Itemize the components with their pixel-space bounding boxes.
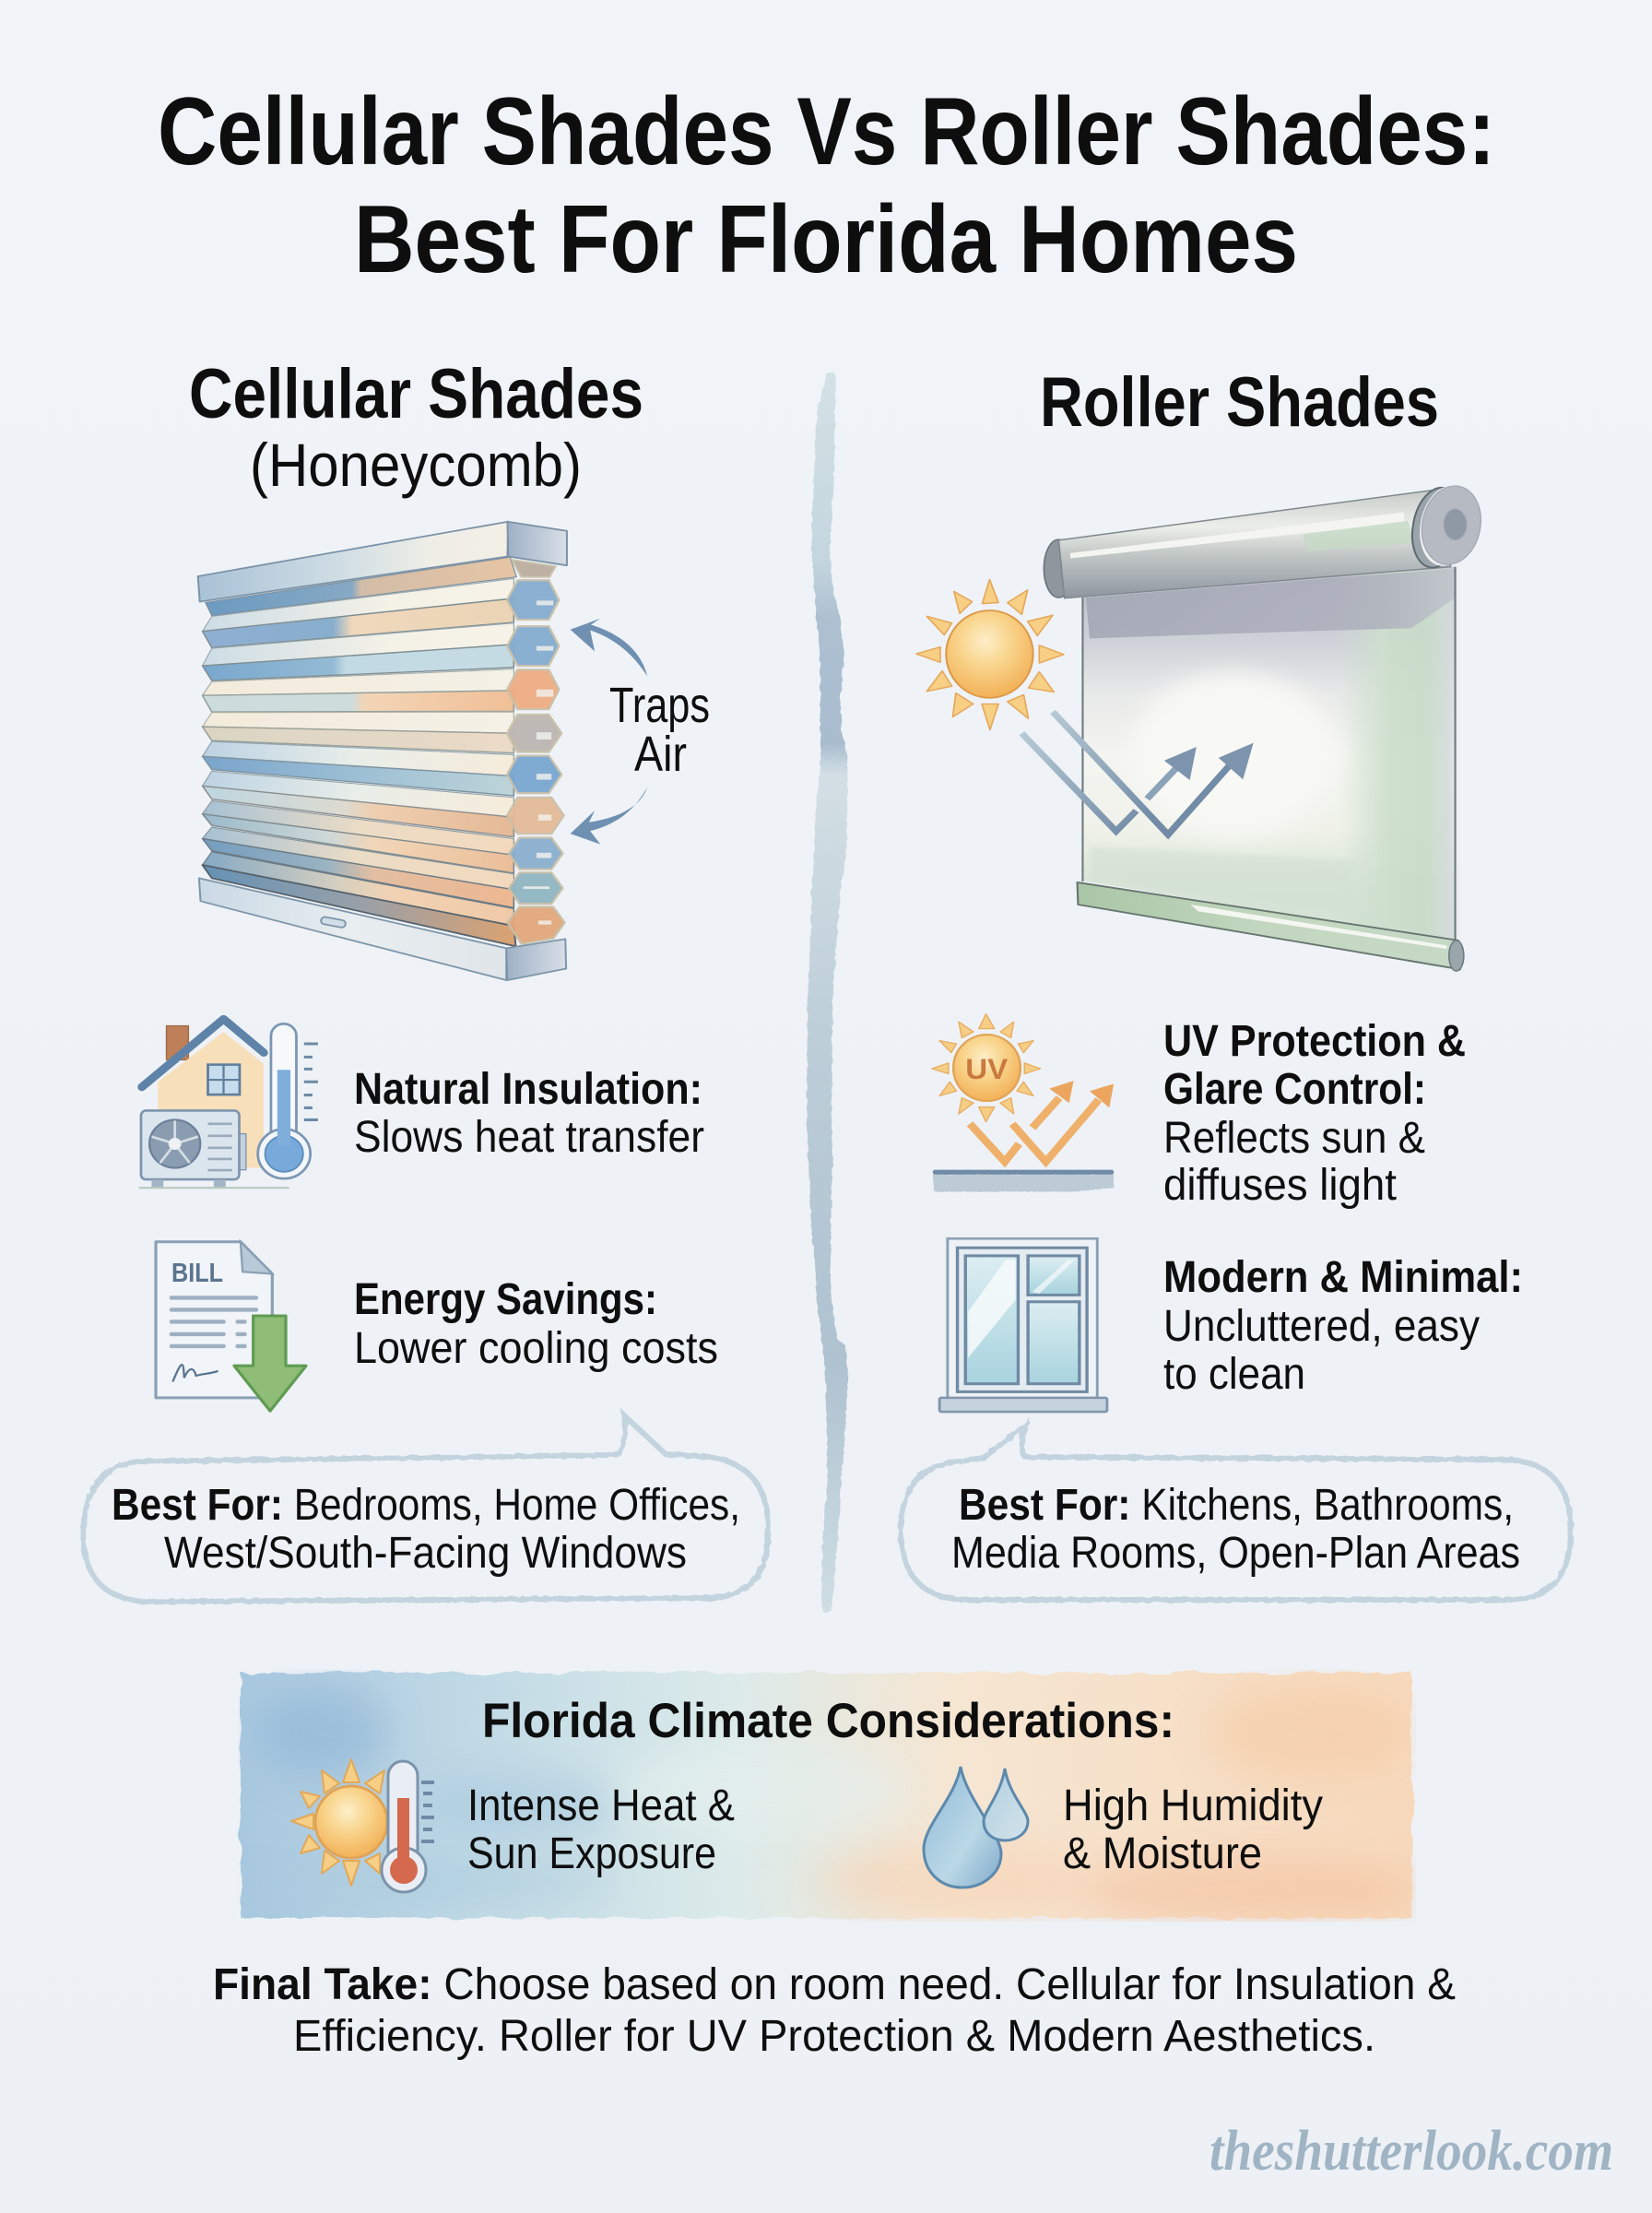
final take: Final Take: Choose based on room need. Cellular for Insulation & (213, 1960, 1456, 2009)
icon: window (939, 1238, 1107, 1412)
text: high humidity (1063, 1781, 1323, 1878)
illustration: honeycomb shade (198, 522, 567, 980)
callout: best for, roller (901, 1426, 1571, 1600)
callout: best for, cellular: West/South-Facing Windows (164, 1529, 687, 1578)
panel: cellular shades (83, 355, 768, 1602)
label: traps air (609, 678, 710, 782)
icon: house, AC unit and thermometer (139, 1019, 318, 1188)
icon: UV sun reflecting: UV (965, 1054, 1008, 1086)
text: uv protection: Reflects sun & (1163, 1114, 1425, 1163)
sun (916, 579, 1064, 730)
text: uv protection: Glare Control: (1163, 1065, 1426, 1114)
text: uv protection: UV Protection & (1163, 1017, 1466, 1066)
text: modern and minimal (1163, 1253, 1523, 1399)
callout: best for, cellular: Best For: Bedrooms, Home Offices, (112, 1481, 740, 1530)
reflected light arrows (1021, 712, 1254, 834)
icon: bill with down arrow (156, 1242, 306, 1411)
text: high humidity: High Humidity (1063, 1781, 1323, 1830)
illustration: roller shade with sun (916, 482, 1486, 971)
text: intense heat: Sun Exposure (467, 1829, 716, 1878)
icon: UV sun reflecting (932, 1014, 1114, 1192)
top rail (198, 522, 567, 601)
text: natural insulation: Natural Insulation: (354, 1065, 702, 1114)
text: energy savings: Lower cooling costs (354, 1324, 718, 1373)
heading: roller shades: Roller Shades (1040, 363, 1439, 442)
icon: water drops (924, 1767, 1028, 1888)
callout: best for, roller: Media Rooms, Open-Plan Areas (951, 1529, 1520, 1578)
label: traps air: Traps (609, 678, 710, 733)
final take (213, 1960, 1456, 2061)
text: uv protection: diffuses light (1163, 1161, 1397, 1210)
honeycomb cells (507, 560, 564, 944)
watermark: theshutterlook.com (1210, 2120, 1613, 2183)
text: natural insulation: Slows heat transfer (354, 1113, 704, 1162)
panel: roller shades (901, 363, 1571, 1600)
callout: best for, cellular (83, 1415, 768, 1602)
text: high humidity: & Moisture (1063, 1829, 1262, 1878)
heading: florida climate: Florida Climate Considerations: (482, 1694, 1174, 1748)
divider: watercolor vertical line (807, 372, 848, 1612)
text: modern and minimal: Uncluttered, easy (1163, 1302, 1480, 1351)
panel: florida climate considerations (241, 1673, 1420, 1923)
final take: Efficiency. Roller for UV Protection & Modern Aesthetics. (293, 2012, 1375, 2061)
text: uv protection (1163, 1017, 1466, 1210)
icon: bill with down arrow: BILL (171, 1259, 223, 1288)
text: energy savings: Energy Savings: (354, 1275, 657, 1324)
title (158, 78, 1495, 293)
bottom rail (199, 878, 566, 980)
text: energy savings (354, 1275, 718, 1373)
text: modern and minimal: Modern & Minimal: (1163, 1253, 1523, 1302)
text: modern and minimal: to clean (1163, 1350, 1305, 1399)
title: Best For Florida Homes (354, 186, 1298, 293)
label: traps air: Air (634, 727, 687, 782)
text: intense heat: Intense Heat & (467, 1781, 735, 1830)
icon: sun and thermometer (291, 1759, 434, 1892)
text: intense heat (467, 1781, 735, 1878)
arrow: air up (571, 619, 647, 676)
heading: cellular shades: Cellular Shades (189, 355, 643, 433)
arrow: air down (571, 787, 647, 845)
subheading: honeycomb: (Honeycomb) (250, 431, 582, 499)
callout: best for, roller: Best For: Kitchens, Bathrooms, (959, 1481, 1514, 1530)
text: natural insulation (354, 1065, 704, 1162)
